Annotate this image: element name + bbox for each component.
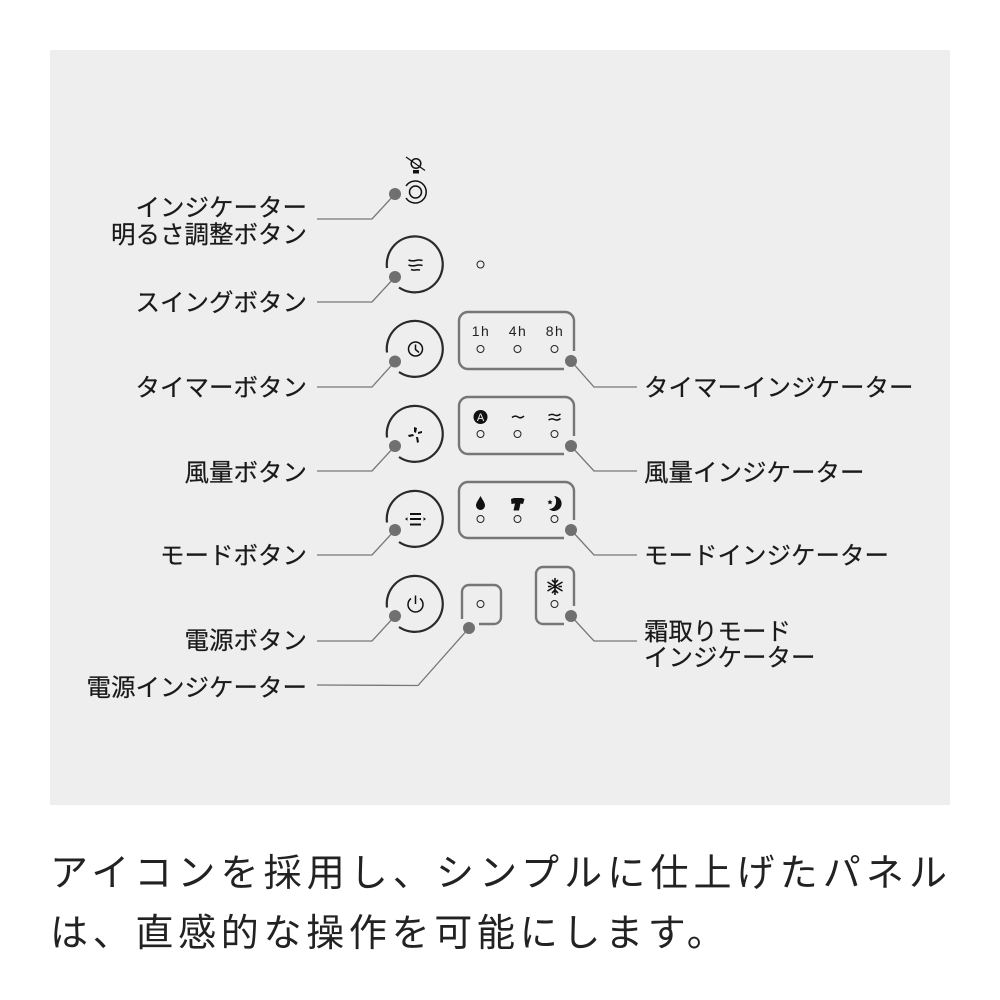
wind speed button [184, 406, 443, 487]
wind speed button: 風量ボタン [184, 460, 307, 487]
frost mode indicator [536, 567, 816, 672]
text block: description: アイコンを採用し、シンプルに仕上げたパネル [50, 853, 952, 895]
panel: timer indicator: 4h [509, 323, 527, 339]
power button [184, 576, 443, 655]
frost mode indicator: インジケーター [644, 645, 816, 672]
power indicator: 電源インジケーター [86, 674, 307, 702]
panel: wind speed indicator [459, 397, 864, 487]
frost mode indicator: 霜取りモード [644, 619, 791, 646]
text block: description: は、直感的な操作を可能にします。 [50, 913, 729, 955]
mode button [160, 491, 443, 570]
panel: wind speed indicator: A [477, 412, 485, 424]
timer button [136, 321, 443, 402]
indicator: swing LED [477, 261, 484, 268]
callout: indicator brightness button: 明るさ調整ボタン [111, 221, 307, 249]
panel: timer indicator [459, 312, 914, 402]
panel: mode indicator [459, 482, 889, 570]
callout: indicator brightness button [111, 188, 401, 249]
icon: indicator brightness button [406, 157, 426, 203]
panel: control panel background [50, 50, 950, 805]
text block: description [50, 853, 952, 955]
panel: mode indicator: モードインジケーター [644, 543, 889, 570]
panel: timer indicator: タイマーインジケーター [644, 375, 914, 402]
timer button: タイマーボタン [136, 375, 307, 402]
swing button: スイングボタン [136, 289, 307, 317]
power button: 電源ボタン [184, 627, 307, 655]
callout: indicator brightness button: インジケーター [136, 195, 307, 222]
mode button: モードボタン [160, 543, 307, 570]
panel: timer indicator: 8h [546, 323, 564, 339]
swing button [136, 236, 443, 317]
power indicator [86, 585, 501, 702]
panel: wind speed indicator: 風量インジケーター [644, 460, 864, 487]
panel: timer indicator: 1h [472, 323, 490, 339]
